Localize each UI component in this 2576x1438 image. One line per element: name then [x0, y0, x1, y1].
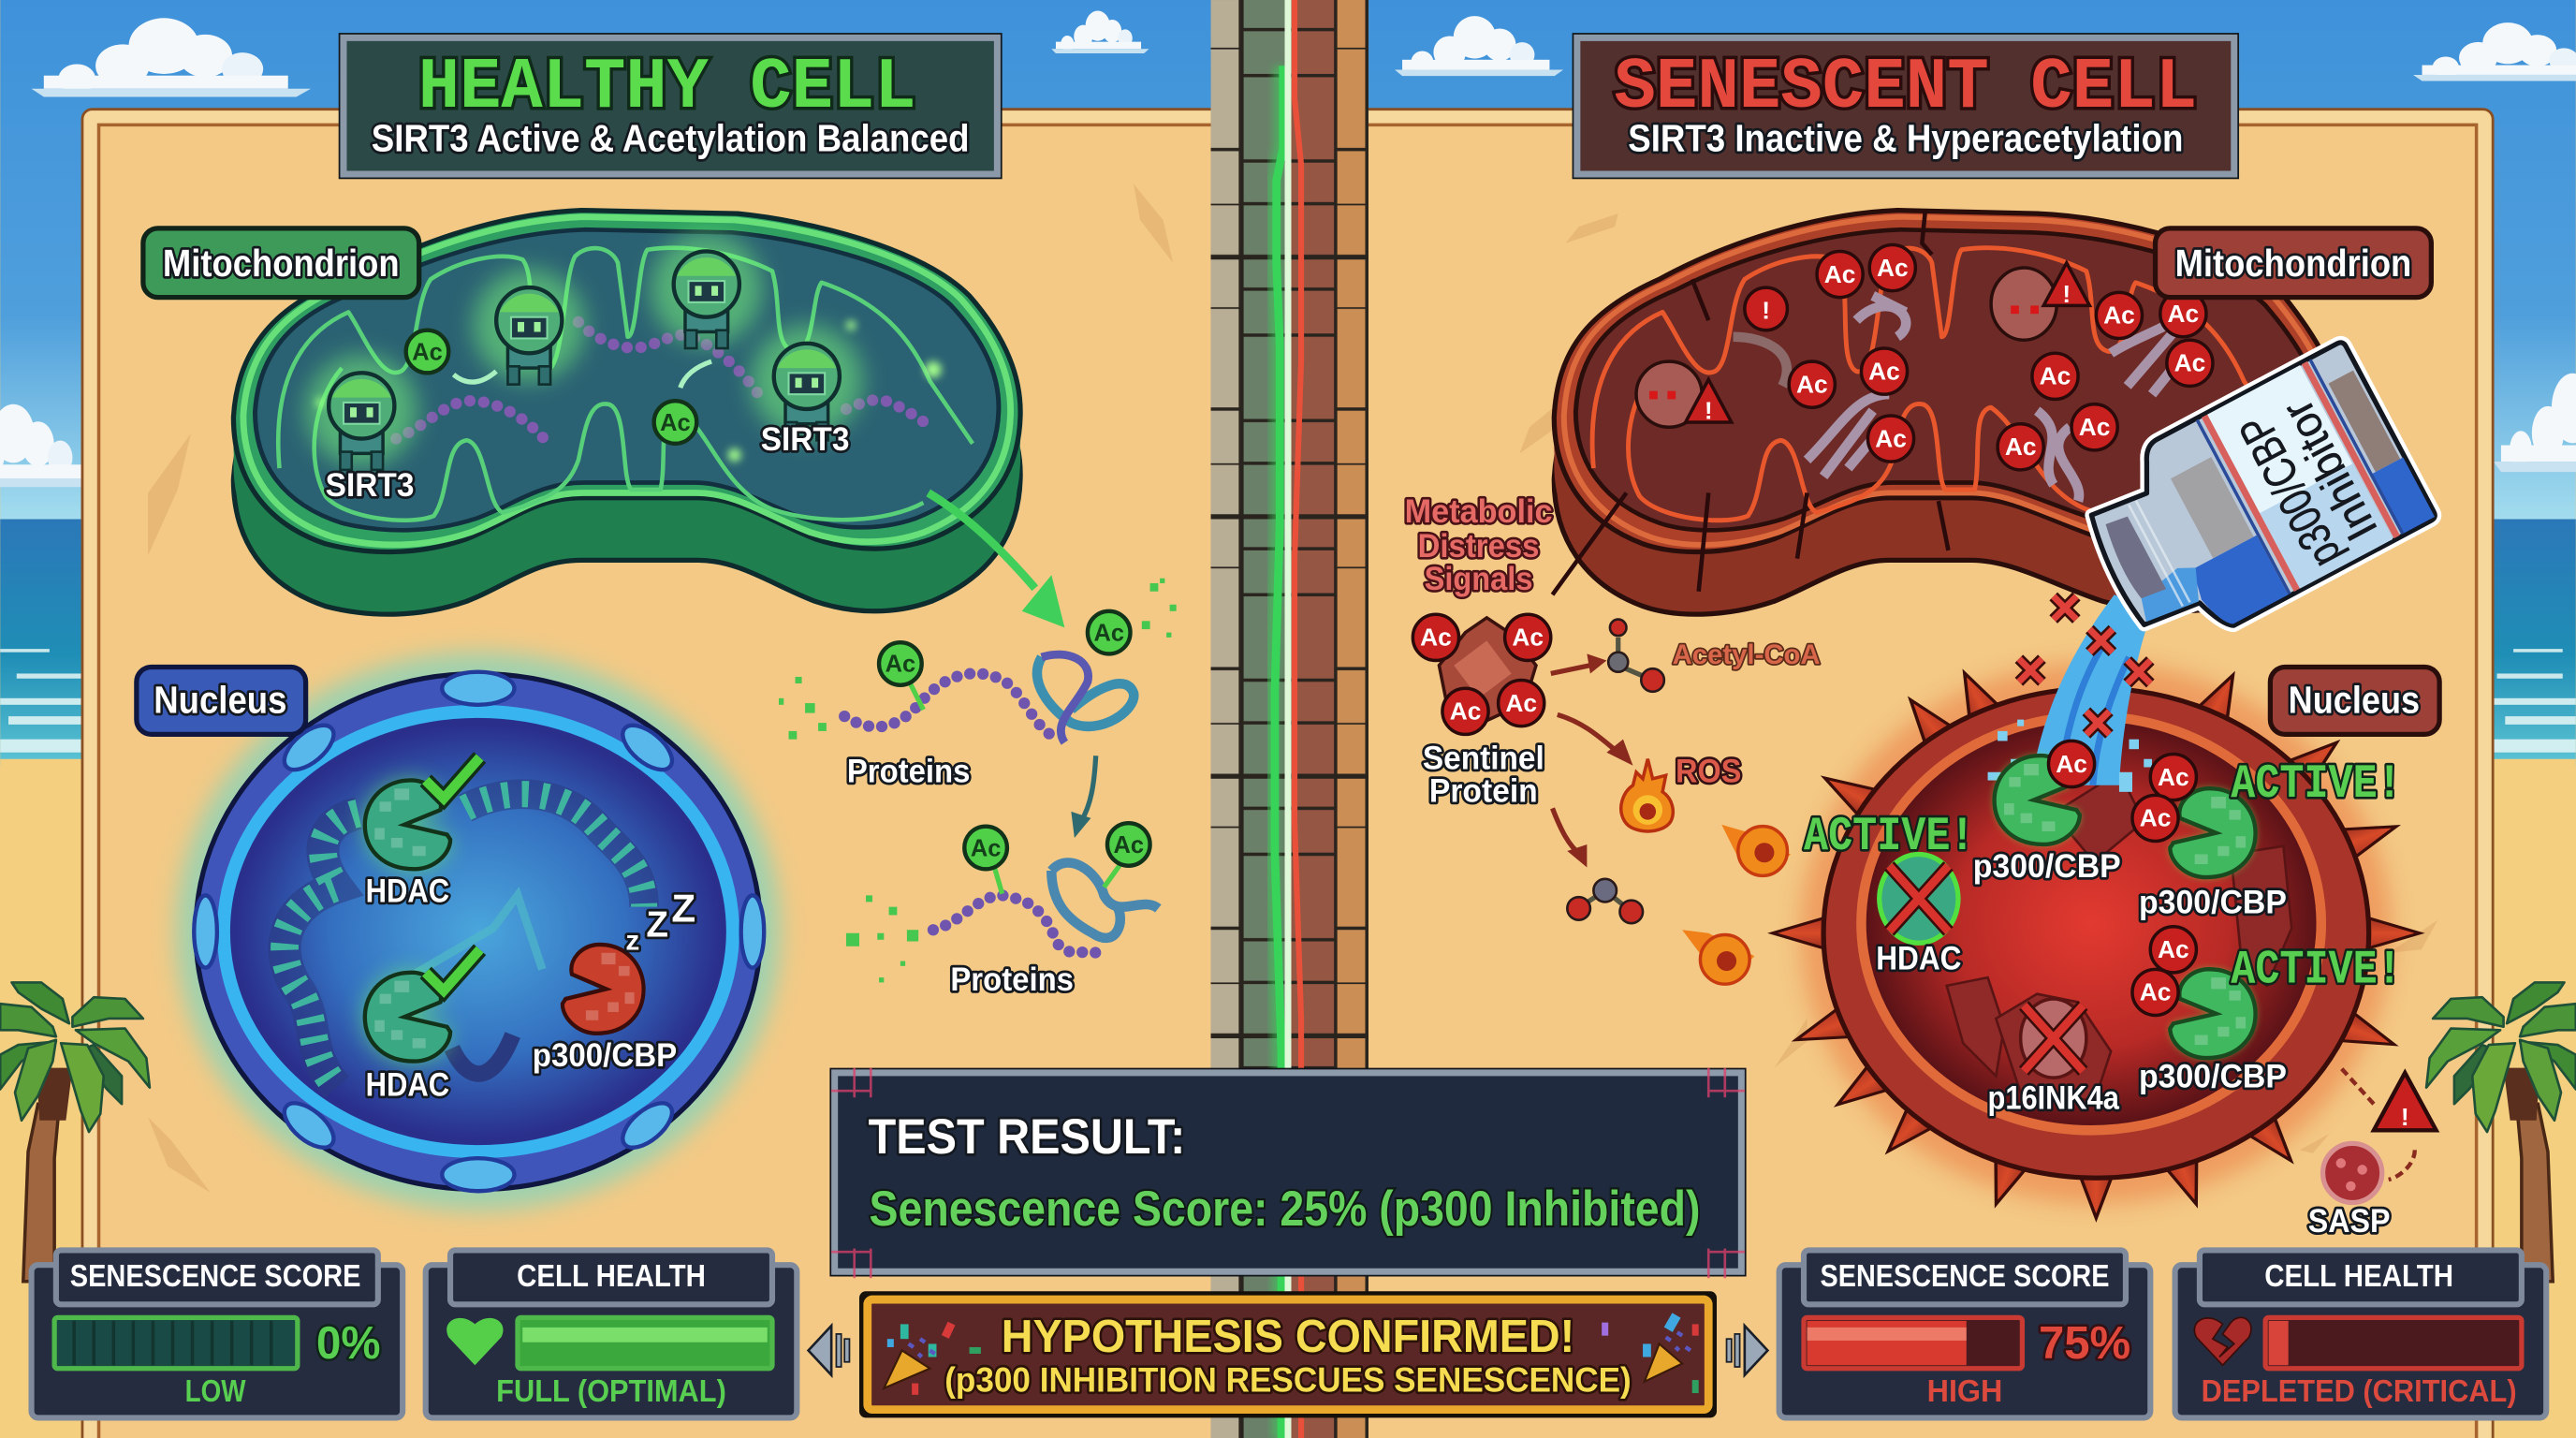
tag: nucleus healthy: Nucleus [154, 679, 286, 722]
subheading: (p300 INHIBITION RESCUES SENESCENCE) [944, 1360, 1632, 1399]
title plate: senescent cell [1573, 33, 2239, 179]
badge Ac [2048, 741, 2095, 787]
label: SASP: SASP [2308, 1203, 2390, 1240]
label: active: ACTIVE! [1804, 811, 1975, 864]
cristae [1592, 248, 2287, 521]
enzyme: HDAC 2 [365, 973, 450, 1062]
badge: Ac: Ac [886, 652, 915, 678]
status: FULL (OPTIMAL) [496, 1374, 726, 1409]
badge Ac [2071, 404, 2117, 450]
tag: mitochondrion healthy: Mitochondrion [163, 242, 400, 285]
label: active: ACTIVE! [2231, 944, 2402, 997]
cracks [1553, 211, 1948, 594]
icon: fireball [1721, 825, 1791, 877]
badge Ac [2096, 292, 2143, 338]
label: SIRT3: SIRT3 [761, 421, 849, 458]
bar 75 percent [1804, 1317, 2022, 1369]
badge Ac [1442, 688, 1488, 734]
badge: Ac [964, 827, 1120, 894]
palm tree left [0, 982, 150, 1282]
healthy mitochondrion [233, 211, 1020, 614]
tag: nucleus healthy [137, 667, 306, 734]
small arrows [454, 361, 711, 388]
badge Ac: Ac [2140, 978, 2171, 1006]
protein chains [396, 322, 931, 439]
badge Ac [2032, 353, 2078, 399]
central stone wall divider [1211, 0, 1368, 1438]
warning [1745, 287, 1787, 330]
status: LOW [185, 1374, 246, 1409]
value: 75% [2039, 1318, 2130, 1369]
arrow: proteins to proteins [1071, 756, 1096, 838]
tag: nucleus senescent: Nucleus [2289, 679, 2420, 722]
icon: speaker arrow right [1727, 1326, 1767, 1375]
tag: mitochondrion senescent: Mitochondrion [2175, 242, 2411, 285]
label: active: ACTIVE! [2231, 758, 2402, 812]
molecule: acetyl-coa [1608, 620, 1664, 692]
arrow to molecule [1553, 808, 1587, 868]
HDAC inhibited [1880, 855, 1958, 943]
label: sentinel: Sentinel [1423, 740, 1544, 776]
damaged robot 1 [1636, 361, 1702, 427]
label: CELL HEALTH [517, 1259, 706, 1294]
icon: party popper left [884, 1339, 935, 1388]
badge Ac [1861, 348, 1908, 394]
label: HDAC: HDAC [366, 873, 449, 909]
badge: Ac: Ac [412, 339, 443, 365]
badge Ac [2150, 927, 2196, 973]
proteins group bottom [846, 823, 1158, 998]
warning: ! [2062, 280, 2071, 308]
badge Ac [2160, 291, 2206, 337]
enzyme: p300 1 [1995, 756, 2080, 844]
metabolic distress signals text [1405, 493, 1553, 597]
label: proteins: Proteins [950, 961, 1074, 998]
label: HDAC: HDAC [366, 1066, 449, 1103]
badge Ac [1412, 614, 1459, 660]
zzz: Z [671, 886, 695, 930]
badge: Ac [1107, 823, 1150, 866]
confetti [887, 1313, 1699, 1395]
badge Ac: Ac [2103, 301, 2135, 330]
background: sea [0, 520, 2576, 766]
badge: Ac: Ac [1093, 620, 1124, 646]
healthy nucleus [176, 653, 781, 1211]
senescent mitochondrion [1553, 211, 2341, 614]
label: SENESCENCE SCORE [1821, 1259, 2109, 1294]
misfolded proteins [1734, 296, 2185, 501]
p16 inhibited [2021, 999, 2086, 1078]
icon: ros flame [1621, 759, 1673, 831]
robot: sirt3 2 [474, 270, 585, 385]
damaged chromatin [1947, 772, 2291, 1101]
badge Ac [1789, 361, 1835, 407]
icon: heart [446, 1318, 504, 1365]
banner: hypothesis confirmed [859, 1291, 1717, 1417]
badge Ac: Ac [2158, 763, 2189, 791]
label: SENESCENCE SCORE [70, 1259, 360, 1294]
icon: party popper right [1645, 1332, 1690, 1382]
label: acetyl-coa: Acetyl-CoA [1673, 639, 1821, 670]
badge: Ac [879, 642, 923, 710]
badge Ac: Ac [1512, 624, 1544, 652]
status: HIGH [1927, 1374, 2002, 1409]
spikes [1773, 666, 2420, 1218]
arrow to ros [1558, 714, 1633, 766]
zzz: z [625, 925, 639, 956]
label: p300/CBP: p300/CBP [1973, 848, 2121, 885]
zzz [625, 886, 695, 956]
senescent nucleus [1773, 594, 2420, 1218]
badge Ac: Ac [1875, 424, 1907, 452]
warning: ! [1762, 296, 1770, 324]
status: DEPLETED (CRITICAL) [2202, 1374, 2517, 1409]
arrow: warning dashed [2341, 1068, 2415, 1180]
badge Ac [2150, 754, 2196, 800]
heading: healthy cell: HEALTHY CELL [418, 48, 916, 129]
enzyme: p300 3 [2170, 969, 2256, 1058]
sea foam [0, 649, 2576, 753]
label: protein: Protein [1429, 772, 1538, 809]
badge: Ac [406, 330, 448, 373]
badge Ac: Ac [2158, 935, 2189, 963]
cristae [278, 248, 973, 521]
label: SIRT3: SIRT3 [326, 467, 414, 504]
nuclear pores [194, 672, 764, 1191]
check 2 [426, 949, 480, 990]
badge Ac: Ac [2040, 362, 2071, 390]
badge: Ac [1088, 611, 1131, 653]
arrow to acetyl-coa [1551, 653, 1606, 673]
panel: test result [829, 1068, 1747, 1278]
hud: senescence score senescent [1779, 1250, 2150, 1417]
badge Ac: Ac [2174, 349, 2205, 377]
badge: Ac [654, 401, 696, 444]
warning [2043, 263, 2089, 308]
badge Ac: Ac [1450, 697, 1481, 726]
hud: cell health healthy [426, 1250, 797, 1417]
hud: cell health senescent [2175, 1250, 2546, 1417]
badge Ac [1817, 251, 1863, 298]
label: CELL HEALTH [2264, 1259, 2453, 1294]
check 1 fill [426, 757, 480, 799]
badge Ac: Ac [1420, 624, 1452, 652]
badge Ac: Ac [1505, 689, 1537, 717]
badge Ac: Ac [2168, 300, 2199, 328]
proteins group top [779, 579, 1177, 789]
background: sky [0, 0, 2576, 526]
icon: SASP particle [2323, 1143, 2382, 1203]
label: p300/CBP: p300/CBP [2230, 406, 2351, 576]
label: ROS: ROS [1676, 753, 1741, 789]
label: p300/CBP: p300/CBP [2139, 1059, 2287, 1095]
enzyme: p300 2 [2170, 788, 2256, 877]
sentinel protein [1412, 614, 1551, 809]
hud: senescence score healthy [32, 1250, 402, 1417]
badge Ac: Ac [1877, 254, 1909, 282]
water splash [1988, 720, 2152, 792]
badge Ac: Ac [2056, 750, 2087, 778]
metabolic distress signals text: Metabolic [1405, 493, 1553, 530]
metabolic distress signals text: Signals [1425, 561, 1532, 597]
bar empty [54, 1317, 298, 1369]
badge: Ac: Ac [971, 835, 1001, 861]
robot: sirt3 3 [651, 233, 762, 348]
damaged robot 2 [1991, 268, 2056, 340]
text: senescence score result: Senescence Score: 25% (p300 Inhibited) [870, 1181, 1700, 1237]
icon: warning triangle: ! [2401, 1103, 2409, 1131]
badge Ac: Ac [2005, 433, 2036, 461]
label: p300/CBP: p300/CBP [533, 1037, 677, 1074]
badge Ac: Ac [2140, 804, 2171, 832]
bottle: p300/CBP inhibitor [2067, 341, 2437, 665]
enzyme: p300 sleeping [563, 945, 644, 1034]
title plate: healthy cell [339, 33, 1003, 179]
metabolic distress signals text: Distress [1418, 528, 1539, 565]
palm tree right [2426, 982, 2576, 1282]
warning [1686, 379, 1732, 424]
badge Ac [1998, 424, 2043, 470]
badge: Ac: Ac [660, 410, 691, 436]
tag: nucleus senescent [2270, 667, 2439, 734]
icon: warning triangle [2374, 1073, 2437, 1131]
robot: sirt3 1 [306, 355, 417, 470]
heading: test result: TEST RESULT: [869, 1109, 1185, 1165]
heading: senescent cell: SENESCENT CELL [1614, 48, 2197, 129]
tag: mitochondrion healthy [143, 228, 419, 298]
robot: sirt3 4 [751, 325, 862, 440]
enzyme: HDAC 1 [365, 780, 450, 869]
background: sand beach [0, 759, 2576, 1438]
bar depleted [2265, 1317, 2522, 1369]
tag: mitochondrion senescent [2156, 228, 2431, 298]
zzz: Z [646, 904, 668, 945]
badge Ac: Ac [1796, 370, 1828, 398]
label: p300/CBP: p300/CBP [2139, 885, 2287, 921]
value: 0% [316, 1318, 380, 1369]
check 1 [426, 757, 480, 799]
badge Ac [1867, 416, 1914, 462]
badge Ac [1869, 244, 1915, 291]
label: proteins: Proteins [847, 753, 970, 789]
molecule [1567, 879, 1643, 923]
badge Ac [2132, 795, 2178, 841]
subtitle: healthy: SIRT3 Active & Acetylation Balanced [372, 116, 970, 159]
icon: fireball [1682, 930, 1754, 984]
arrow: mitochondrion to proteins [929, 492, 1064, 627]
label: Inhibitor: Inhibitor [2273, 391, 2388, 549]
bar full [518, 1317, 772, 1369]
badge Ac: Ac [1868, 357, 1900, 385]
badge Ac [2132, 969, 2178, 1015]
badge Ac: Ac [2079, 413, 2110, 441]
label: HDAC: HDAC [1876, 940, 1961, 976]
badge: Ac: Ac [1114, 832, 1144, 858]
badge Ac [2167, 340, 2213, 386]
inhibitor x marks [2019, 596, 2150, 734]
warning: ! [1705, 396, 1713, 424]
badge Ac [1499, 680, 1544, 726]
icon: speaker arrow left [809, 1326, 849, 1375]
subtitle: senescent: SIRT3 Inactive & Hyperacetylation [1628, 116, 2183, 159]
badge Ac [1505, 614, 1551, 660]
label: p16INK4a: p16INK4a [1988, 1080, 2119, 1117]
badge Ac: Ac [1824, 260, 1855, 288]
water stream [2030, 594, 2152, 785]
clouds [0, 10, 2576, 487]
dna helix [285, 794, 644, 1088]
check 2 fill [426, 949, 480, 990]
icon: broken heart [2194, 1317, 2251, 1365]
heading: hypothesis: HYPOTHESIS CONFIRMED! [1002, 1312, 1574, 1362]
